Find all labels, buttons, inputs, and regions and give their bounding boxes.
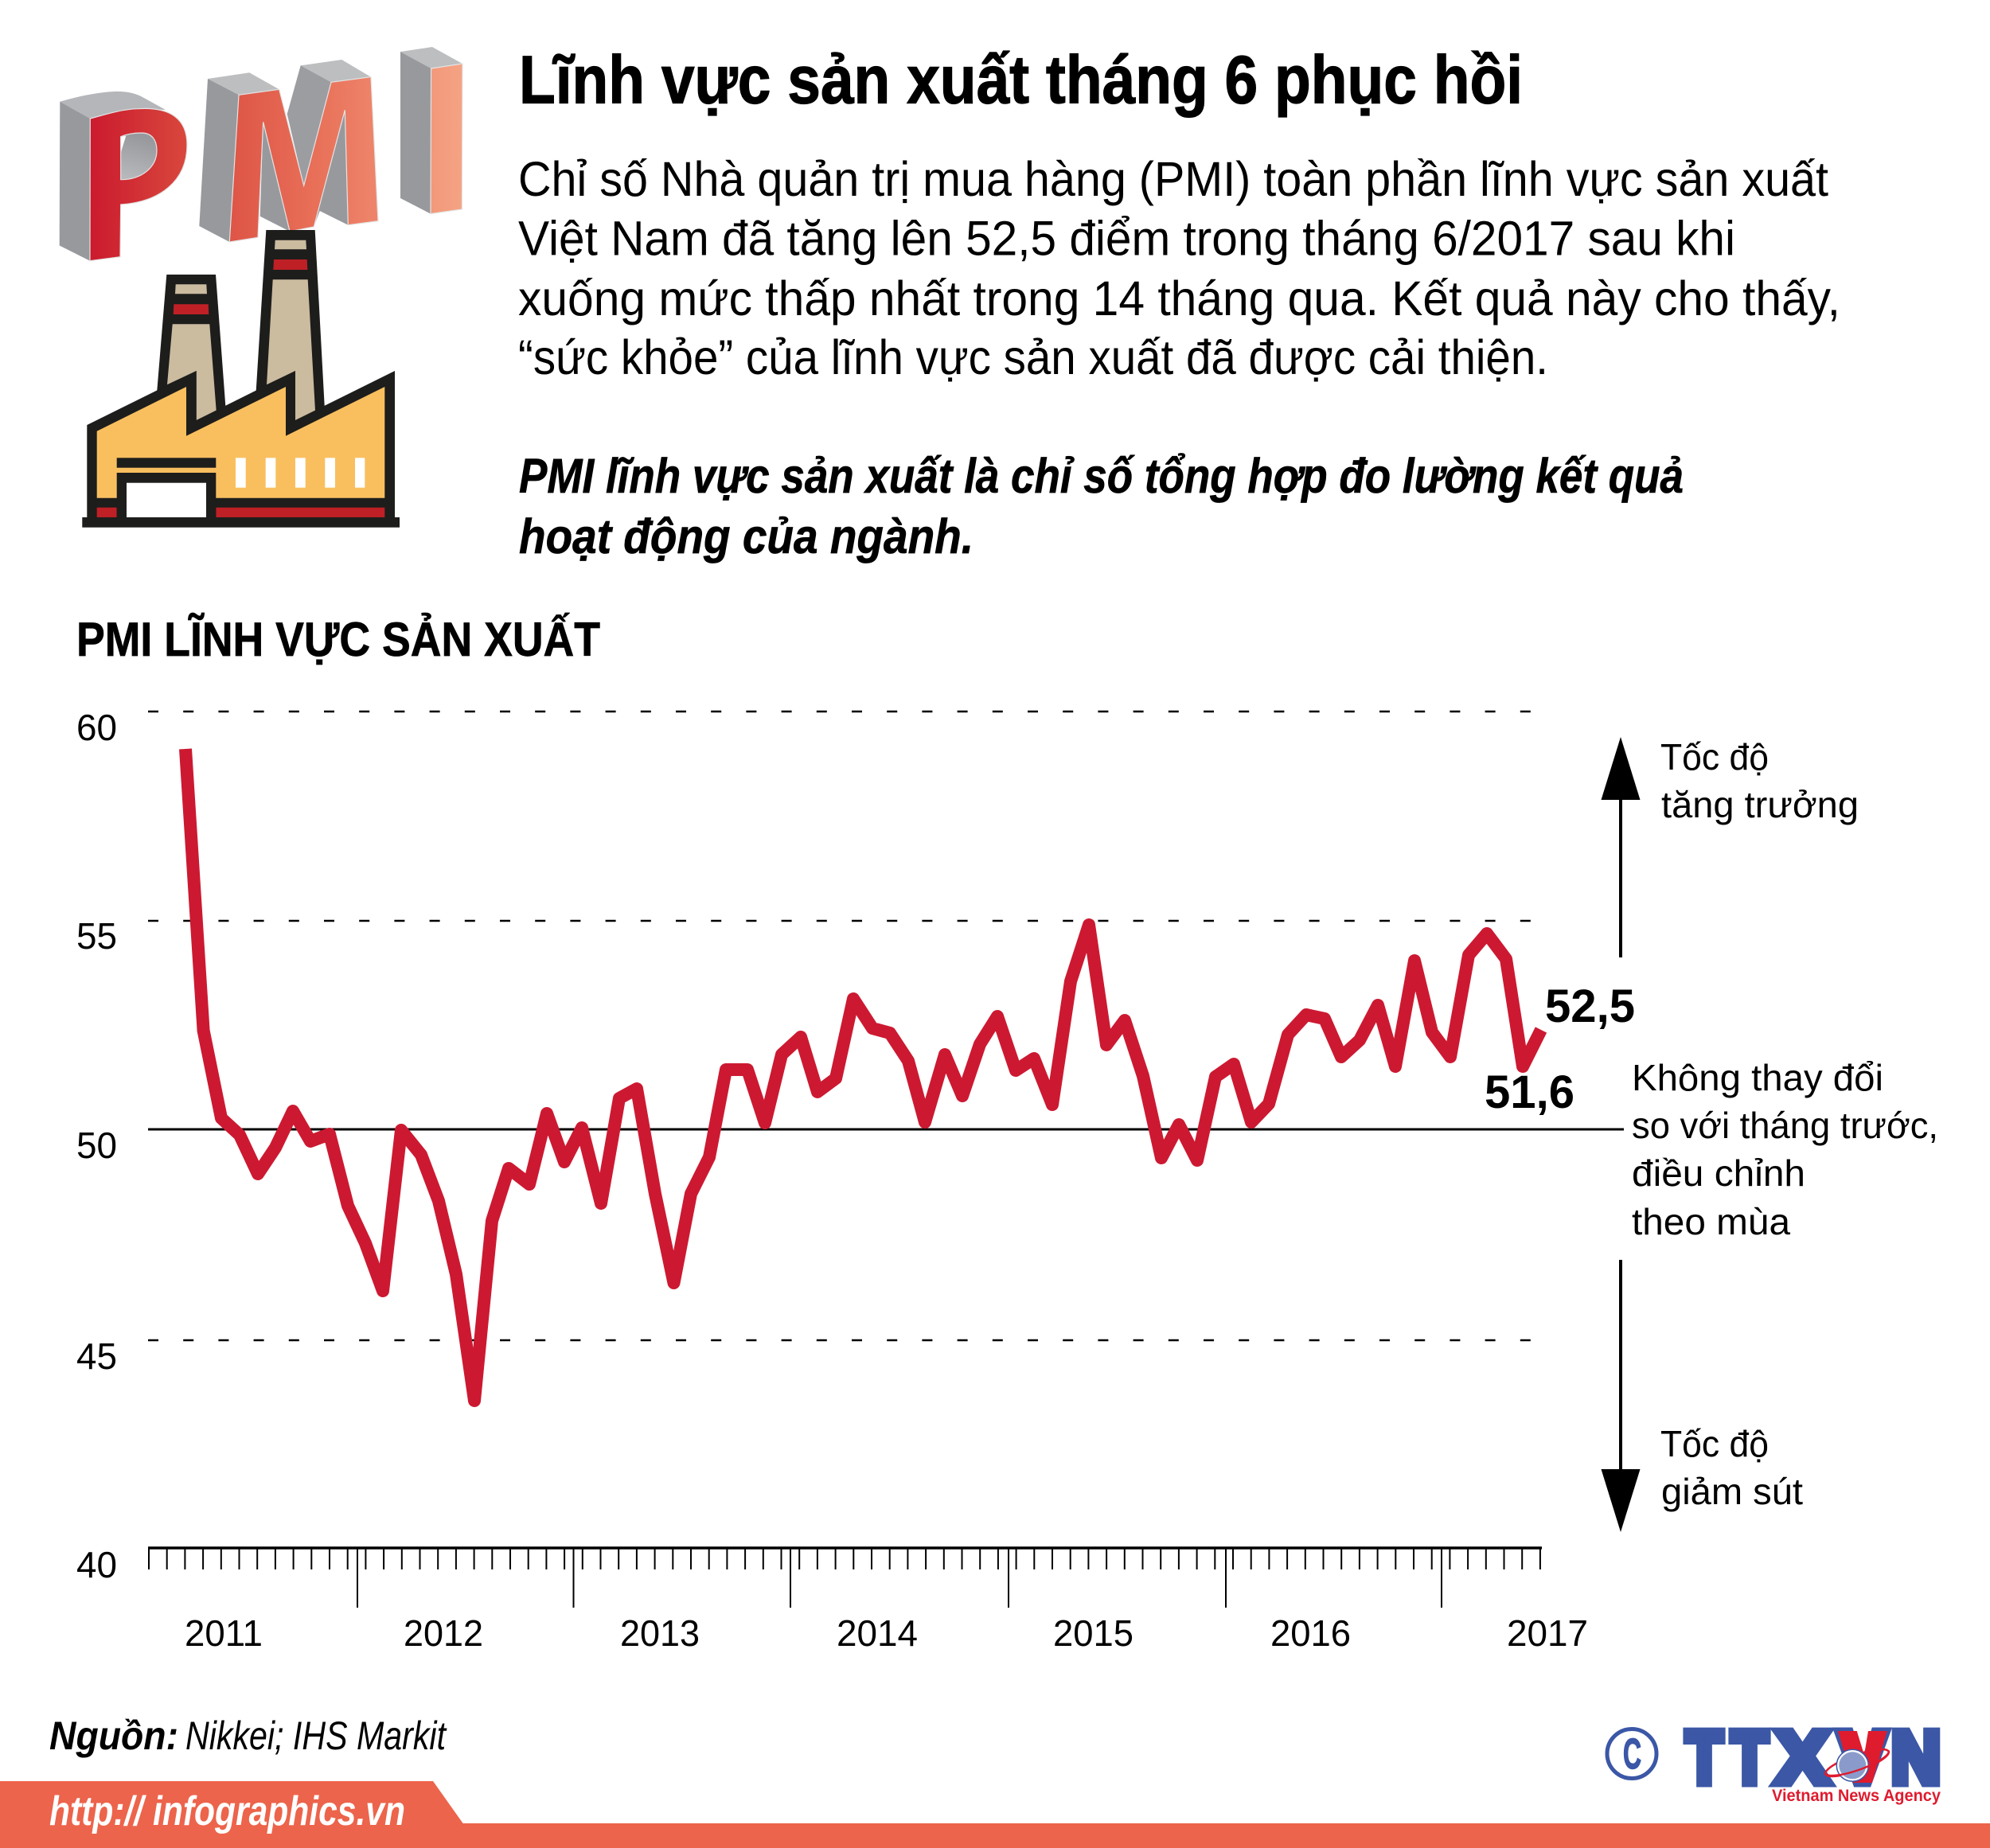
no change label: điều chỉnh — [1632, 1152, 1805, 1194]
intro text block: “sức khỏe” của lĩnh vực sản xuất đã được cải thiện. — [518, 330, 1548, 384]
letter M — [199, 60, 378, 242]
intro text block: xuống mức thấp nhất trong 14 tháng qua. Kết quả này cho thấy, — [518, 271, 1840, 326]
TTXVN logo: X — [1776, 1716, 1829, 1799]
x-axis with ticks — [148, 1548, 1542, 1608]
building — [87, 371, 395, 519]
door — [117, 458, 216, 519]
arrow down — [1602, 1260, 1640, 1532]
letter P — [60, 92, 187, 261]
source: Nikkei; IHS Markit — [185, 1713, 447, 1758]
ground line — [82, 517, 400, 528]
title: Lĩnh vực sản xuất tháng 6 phục hồi — [519, 43, 1523, 118]
y-axis labels: 50 — [76, 1125, 117, 1166]
x-axis year labels: 2014 — [837, 1612, 918, 1654]
no change label: so với tháng trước, — [1632, 1105, 1938, 1146]
decline label — [1660, 1423, 1803, 1512]
growth label: Tốc độ — [1660, 736, 1769, 778]
TTXVN logo: V — [1838, 1716, 1887, 1799]
value label 51,6: 51,6 — [1485, 1066, 1574, 1118]
italic definition: PMI lĩnh vực sản xuất là chỉ số tổng hợp đo lường kết quả — [519, 449, 1684, 503]
intro text block: Việt Nam đã tăng lên 52,5 điểm trong tháng 6/2017 sau khi — [518, 212, 1735, 266]
right chimney — [256, 230, 325, 423]
decline label: giảm sút — [1661, 1471, 1803, 1512]
footer url: http:// infographics.vn — [49, 1788, 405, 1834]
growth label: tăng trưởng — [1661, 784, 1859, 825]
arrow up — [1602, 737, 1640, 957]
letter I — [400, 47, 462, 214]
value label 52,5: 52,5 — [1545, 981, 1635, 1032]
TTXVN logo: N — [1891, 1716, 1941, 1799]
y-axis labels — [76, 707, 117, 1585]
decline label: Tốc độ — [1660, 1423, 1769, 1464]
no change label: Không thay đổi — [1632, 1057, 1883, 1098]
left chimney — [157, 275, 225, 423]
source: Nguồn: — [49, 1713, 178, 1758]
intro text block: Chỉ số Nhà quản trị mua hàng (PMI) toàn phần lĩnh vực sản xuất — [518, 152, 1828, 206]
x-axis year labels: 2013 — [620, 1612, 700, 1654]
copyright mark: C — [1623, 1730, 1641, 1778]
y-axis labels: 55 — [76, 915, 117, 957]
TTXVN logo: T — [1731, 1716, 1768, 1799]
x-axis year labels — [185, 1612, 1588, 1654]
icon: 3D PMI letters — [60, 47, 462, 261]
globe — [1823, 1744, 1891, 1782]
x-axis year labels: 2015 — [1053, 1612, 1134, 1654]
red PMI data line — [185, 749, 1541, 1401]
intro text block — [518, 152, 1840, 384]
windows — [236, 458, 365, 488]
copyright mark — [1607, 1729, 1656, 1778]
TTXVN logo: T — [1686, 1716, 1723, 1799]
source — [49, 1713, 447, 1758]
y-axis labels: 60 — [76, 707, 117, 748]
italic definition — [519, 449, 1684, 563]
chart heading: PMI LĨNH VỰC SẢN XUẤT — [76, 613, 600, 666]
floor strip — [97, 508, 384, 517]
y-axis labels: 45 — [76, 1335, 117, 1377]
V notch and red V — [1838, 1725, 1887, 1783]
TTXVN logo — [1686, 1716, 1941, 1805]
no change label: theo mùa — [1632, 1201, 1790, 1242]
x-axis year labels: 2017 — [1507, 1612, 1588, 1654]
x-axis year labels: 2012 — [404, 1612, 483, 1654]
line chart — [76, 707, 1635, 1654]
growth label — [1660, 736, 1859, 825]
y-axis labels: 40 — [76, 1544, 117, 1585]
icon: factory — [82, 230, 400, 528]
agency name: Vietnam News Agency — [1772, 1787, 1941, 1805]
footer bar — [0, 1781, 1990, 1848]
x-axis year labels: 2016 — [1270, 1612, 1351, 1654]
italic definition: hoạt động của ngành. — [519, 509, 974, 563]
x-axis year labels: 2011 — [185, 1612, 263, 1654]
no change label — [1632, 1057, 1938, 1242]
